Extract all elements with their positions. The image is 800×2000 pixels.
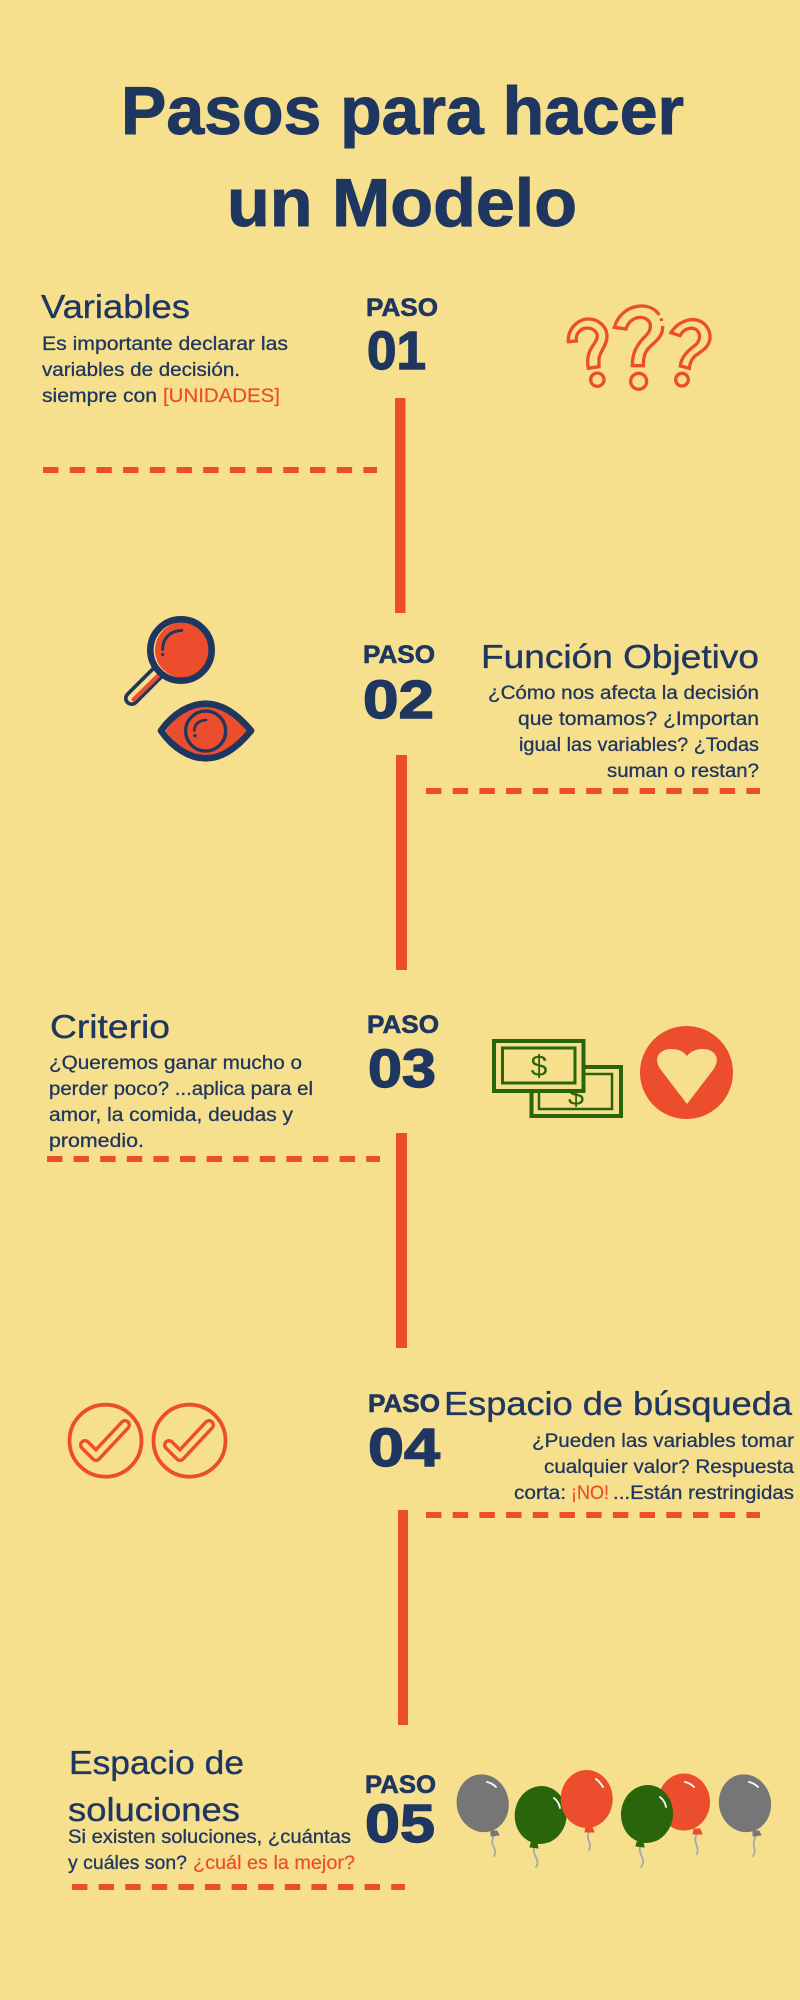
text block: variables: variables de decisión. [42,359,240,381]
step label: paso 02 [363,641,435,730]
heading: Funcion Objetivo: Función Objetivo [481,638,759,675]
text block: espacio de busqueda [514,1430,795,1504]
text block: espacio de soluciones [68,1826,355,1874]
icon: balloons [451,1770,776,1867]
text block: funcion objetivo: que tomamos? ¿Importan [518,708,759,730]
connector line 4 [398,1510,408,1725]
step label: paso 05 [365,1771,436,1854]
panel: paso 04 espacio de busqueda [70,1385,795,1515]
text block: funcion objetivo: ¿Cómo nos afecta la decisión [488,682,759,704]
text block: variables: siempre con [42,385,157,407]
text block: espacio de busqueda: ¿Pueden las variables tomar [532,1430,795,1452]
heading: Espacio de busqueda: Espacio de búsqueda [444,1385,793,1422]
step label: paso 04 [368,1390,440,1478]
icon: question marks [568,306,710,389]
connector line 1 [395,398,406,613]
text block: espacio de busqueda: cualquier valor? Respuesta [544,1456,794,1478]
step label: paso 01 [366,294,438,381]
heading: Espacio de soluciones: soluciones [68,1791,240,1828]
step label: paso 03 [367,1011,439,1099]
text block: variables: [UNIDADES] [163,385,280,407]
panel: paso 03 criterio [47,1008,733,1159]
icon: eye [161,704,251,758]
text block: criterio: ¿Queremos ganar mucho o [49,1052,302,1074]
connector line 3 [396,1133,407,1348]
icon: check marks [70,1405,226,1477]
text block: criterio: amor, la comida, deudas y [49,1104,293,1126]
text block: funcion objetivo: suman o restan? [607,760,759,782]
dashed divider [426,1512,760,1518]
step label: paso 04: 04 [368,1418,440,1478]
text block: espacio de busqueda: corta: [514,1482,566,1504]
step label: paso 02: 02 [363,670,434,730]
heading: Criterio: Criterio [50,1008,170,1045]
text block: variables [42,333,288,407]
title: un Modelo [227,165,577,241]
text block: criterio [49,1052,313,1152]
step label: paso 03: 03 [368,1039,436,1099]
dashed divider [72,1884,405,1890]
step label: paso 01: 01 [367,321,426,381]
step label: paso 02: PASO [363,641,435,669]
text block: variables: Es importante declarar las [42,333,288,355]
text block: espacio de soluciones: y cuáles son? [68,1852,187,1874]
text block: criterio: perder poco? ...aplica para el [49,1078,313,1100]
icon: heart in circle [640,1026,733,1119]
step label: paso 04: PASO [368,1390,440,1418]
heading: Variables: Variables [41,288,190,325]
icon: magnifier [132,619,212,700]
title [121,73,684,241]
icon: money bills [494,1041,621,1116]
dashed divider [47,1156,380,1162]
text block: espacio de busqueda: ¡NO! [571,1482,609,1504]
icon: money bills: $ [568,1080,584,1112]
icon: money bills: $ [531,1050,548,1083]
text block: criterio: promedio. [49,1130,144,1152]
text block: funcion objetivo: igual las variables? ¿Todas [519,734,759,756]
connector line 2 [396,755,407,970]
heading: Espacio de soluciones [68,1744,244,1828]
step label: paso 05: PASO [365,1771,436,1799]
panel: paso 01 variables [41,288,710,470]
text block: funcion objetivo [488,682,759,782]
title: Pasos para hacer [121,73,684,149]
step label: paso 03: PASO [367,1011,439,1039]
panel: paso 05 espacio de soluciones [68,1744,776,1887]
step label: paso 05: 05 [365,1794,435,1854]
dashed divider [426,788,760,794]
heading: Espacio de soluciones: Espacio de [69,1744,244,1781]
text block: espacio de busqueda: ...Están restringidas [613,1482,794,1504]
dashed divider [43,467,377,473]
panel: paso 02 funcion objetivo [132,619,760,791]
text block: espacio de soluciones: Si existen soluciones, ¿cuántas [68,1826,351,1848]
text block: espacio de soluciones: ¿cuál es la mejor? [193,1852,355,1874]
step label: paso 01: PASO [366,294,438,322]
